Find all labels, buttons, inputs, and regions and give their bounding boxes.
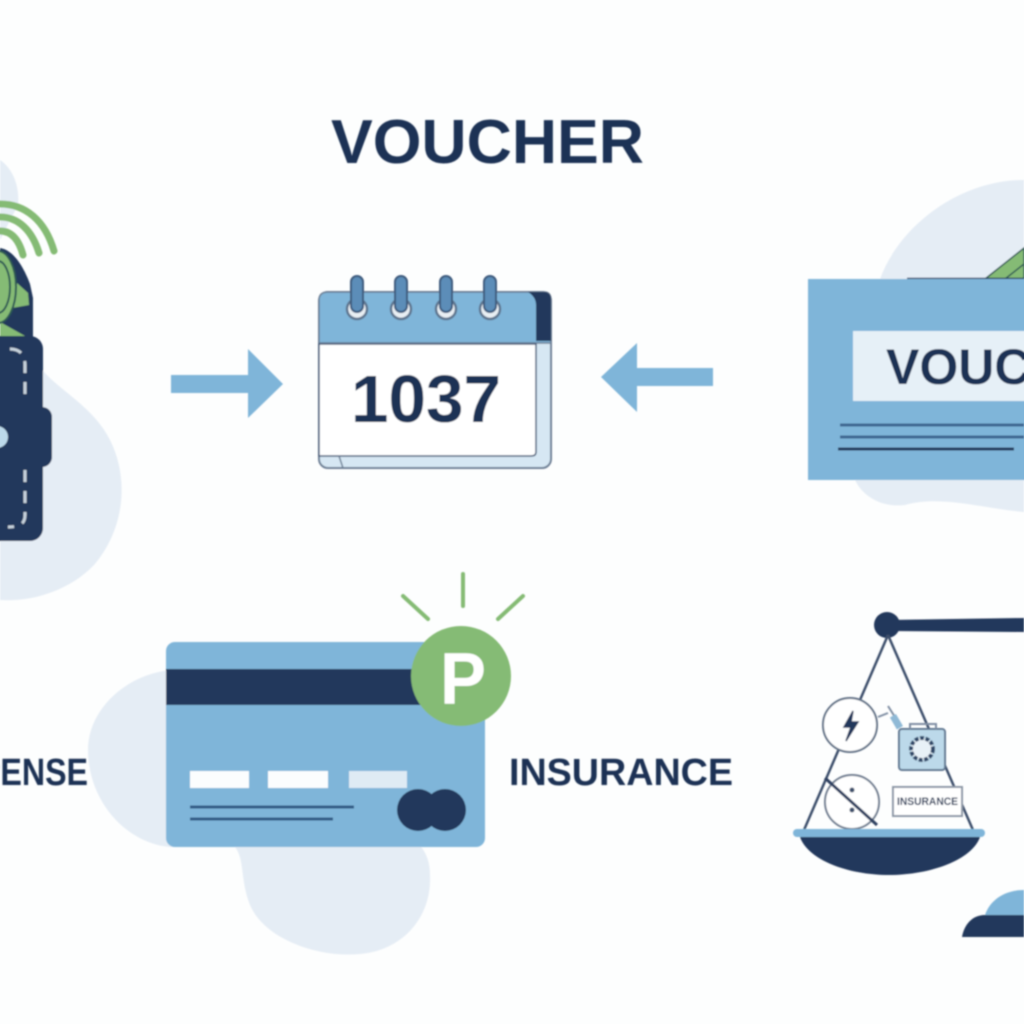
insurance label: INSURANCE [509, 752, 733, 794]
lightning icon [823, 698, 877, 752]
wallet illustration [0, 160, 122, 600]
title: VOUCHER [331, 108, 644, 177]
insurance tag [893, 787, 962, 816]
left arrow [601, 343, 713, 412]
scale hanging lines [804, 635, 973, 830]
connector [878, 706, 900, 725]
voucher text lines [838, 425, 1024, 449]
card logo circles [397, 789, 466, 831]
right arrow [171, 349, 283, 418]
wifi signal arcs [0, 204, 54, 255]
card stripe [166, 669, 428, 705]
calendar rings [347, 276, 500, 319]
wallet background blob [0, 160, 122, 600]
calendar header [319, 292, 551, 343]
scale pan [793, 829, 985, 875]
calendar corner [528, 292, 551, 341]
voucher card [808, 279, 1024, 480]
insurance tag: INSURANCE [897, 796, 958, 808]
voucher green note [985, 248, 1024, 279]
wallet clasp [0, 426, 8, 448]
scale base [962, 890, 1024, 937]
calendar [319, 276, 551, 468]
green coin [0, 251, 29, 336]
no-coin icon [825, 775, 879, 829]
card number blocks [190, 771, 407, 788]
calendar number: 1037 [351, 362, 501, 437]
voucher label panel [853, 331, 1024, 401]
wallet stitching [8, 349, 25, 527]
points badge [411, 626, 511, 726]
credit card illustration [88, 574, 523, 955]
card body [166, 642, 485, 847]
calendar page [319, 344, 536, 456]
card text lines [190, 807, 354, 819]
points badge: P [440, 639, 486, 720]
scale beam [887, 618, 1024, 632]
badge rays [403, 574, 523, 619]
voucher illustration [808, 180, 1024, 512]
wallet strap [0, 407, 52, 467]
wallet body [0, 336, 43, 541]
wallet back flap [0, 248, 33, 342]
balance scale [793, 612, 1024, 937]
card background blobs [88, 670, 430, 955]
gear box icon [899, 724, 945, 770]
scale pivot [874, 612, 900, 638]
calendar back page [319, 292, 551, 468]
voucher background blob [855, 180, 1024, 512]
